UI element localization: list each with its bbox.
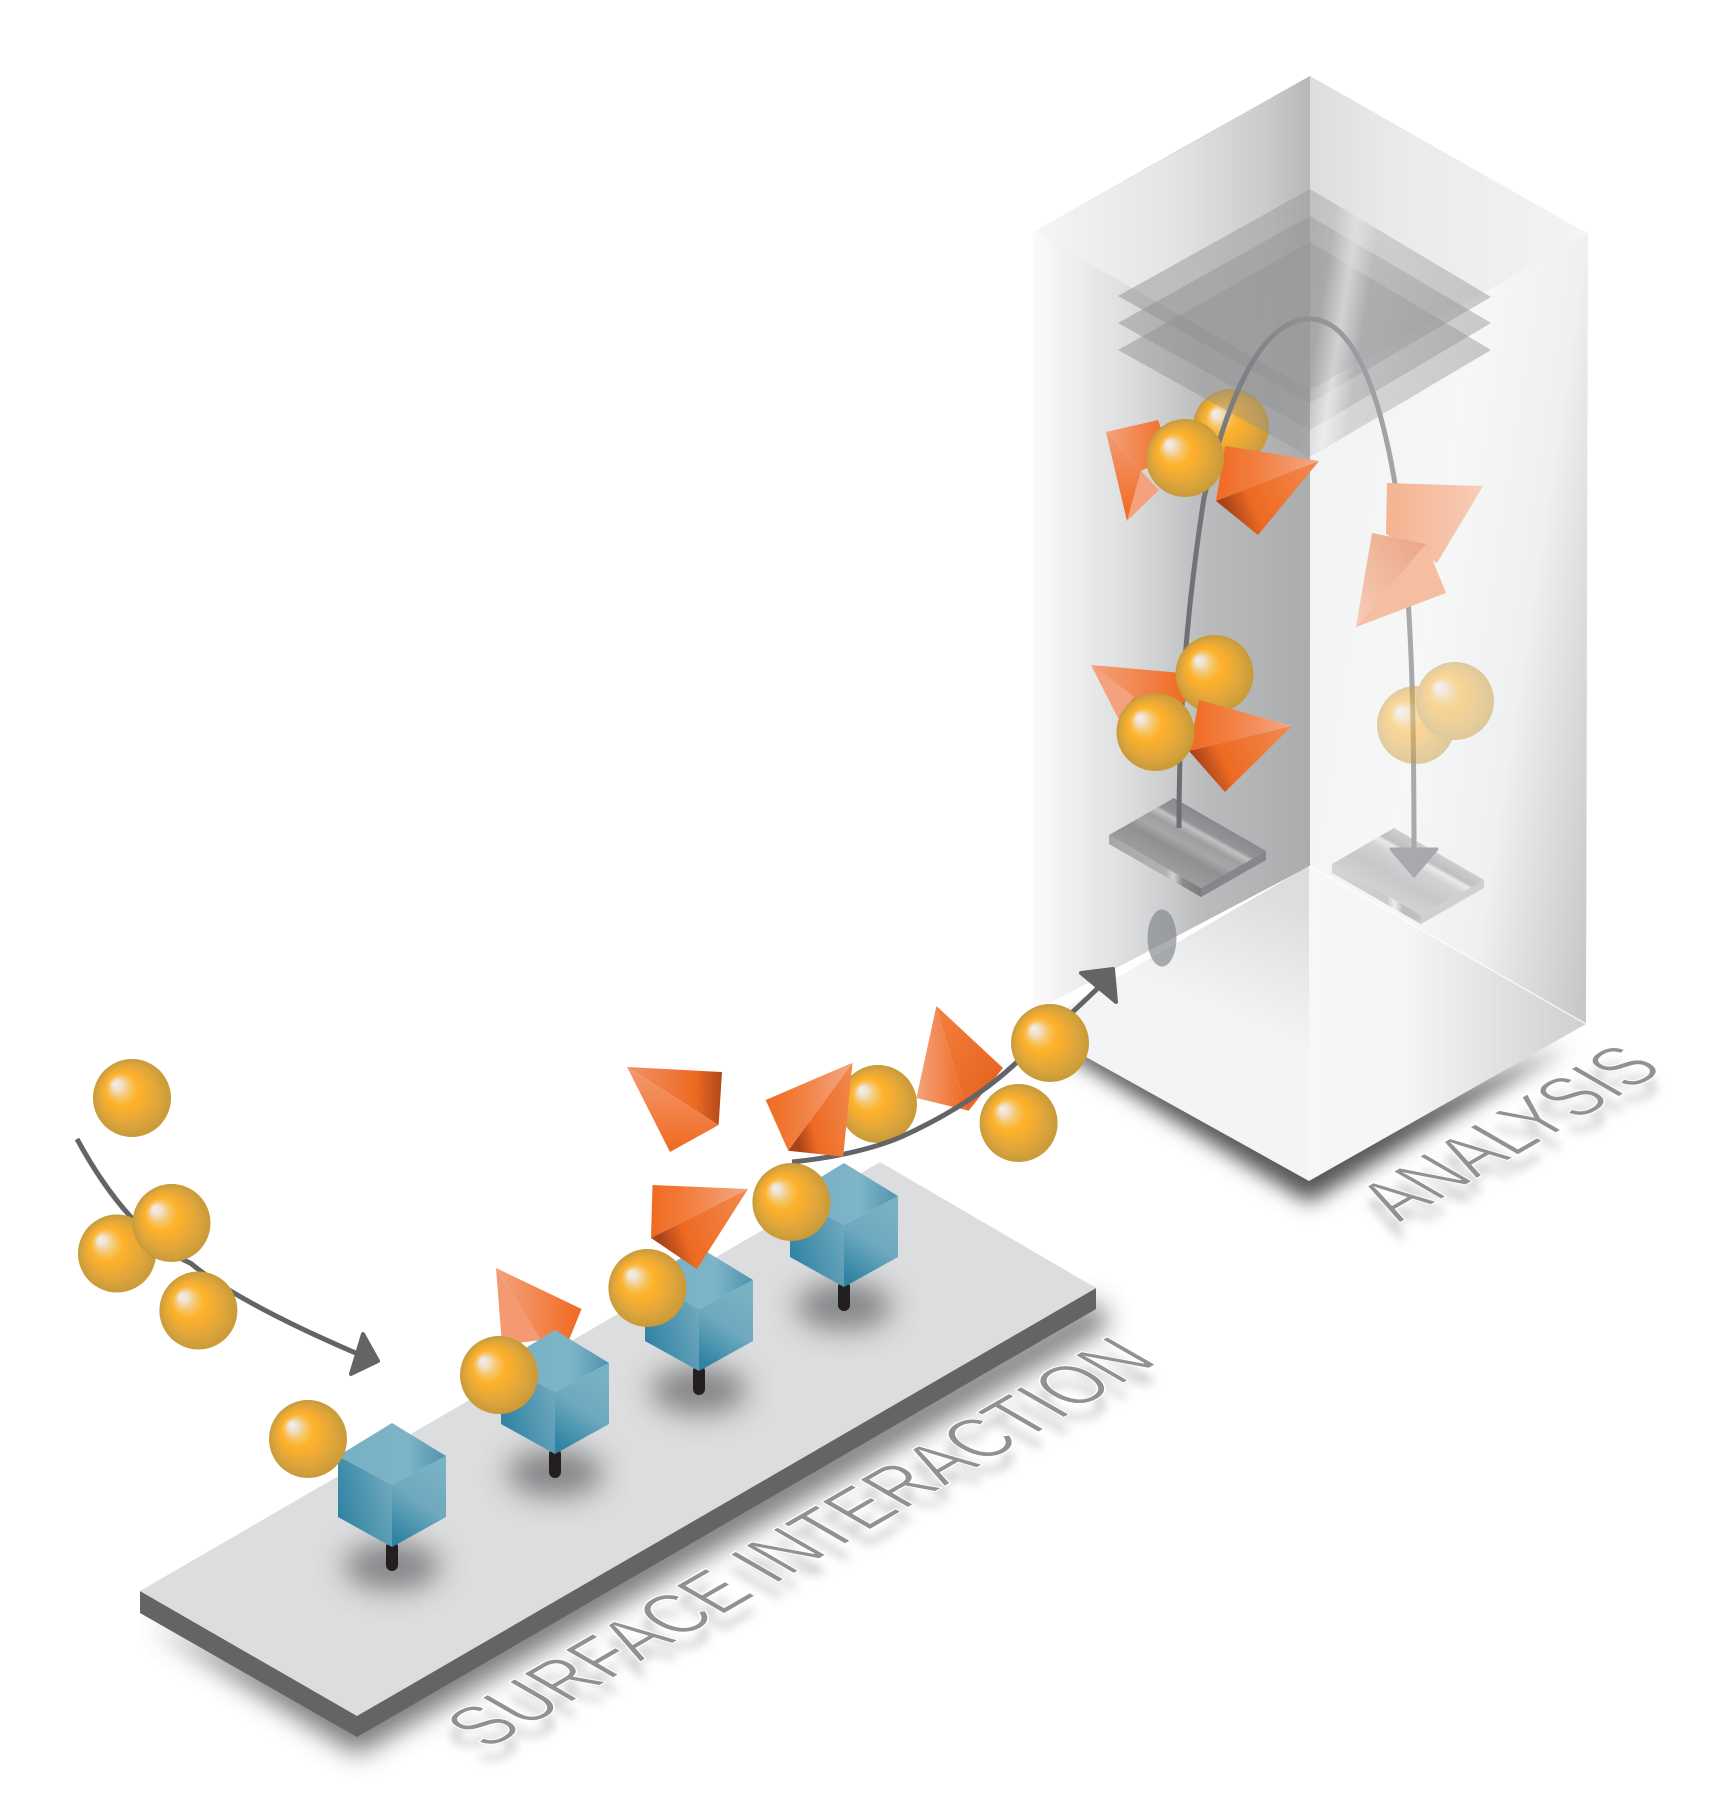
floor shadow <box>1060 1040 1570 1203</box>
ball lower right <box>980 1084 1058 1162</box>
right slab <box>1332 828 1484 924</box>
free tetrahedron <box>627 1067 722 1152</box>
faded tetrahedron upper <box>1386 483 1483 563</box>
label shadows: SURFACE INTERACTION <box>426 1342 1176 1775</box>
arrow: outflow curve <box>792 969 1116 1162</box>
ball at receptor 3 <box>608 1249 686 1327</box>
panel: analysis chamber <box>1032 76 1588 1181</box>
upper ions: tetrahedron right <box>1216 446 1319 535</box>
receptor 3 <box>645 1247 753 1395</box>
receptor 4 <box>790 1163 898 1311</box>
left slab <box>1109 798 1266 897</box>
ball entering chamber <box>1011 1004 1089 1082</box>
chamber floor <box>1032 866 1586 1181</box>
platform shadow <box>150 1300 1110 1755</box>
lower ions: ball back <box>1176 635 1254 713</box>
receptor 1 <box>338 1423 446 1571</box>
ball at receptor 2 <box>460 1336 538 1414</box>
balls in flow <box>78 1059 237 1350</box>
detector plates <box>1118 189 1491 457</box>
arrow: inflow curve <box>77 1139 378 1374</box>
chamber top plane <box>1035 76 1588 390</box>
aperture <box>1148 910 1176 966</box>
faded tetrahedron lower <box>1356 533 1446 627</box>
lower ions: tetrahedron left <box>1091 665 1186 718</box>
receptor 2 <box>501 1330 609 1478</box>
platform left side <box>140 1591 357 1737</box>
upper ions: tetrahedron left <box>1106 420 1171 521</box>
tetrahedron behind receptor 2 <box>496 1268 582 1350</box>
label shadows <box>426 1049 1681 1775</box>
upper ions: ball <box>1146 419 1224 497</box>
ball behind plates <box>1193 389 1269 465</box>
receptor shadows <box>344 1282 892 1590</box>
tetrahedron on outflow <box>766 1063 852 1157</box>
lower ions: tetrahedron right <box>1189 700 1292 792</box>
platform right side <box>357 1288 1096 1737</box>
faded balls <box>1377 662 1494 764</box>
panel: surface platform <box>140 1162 1096 1737</box>
platform top <box>140 1162 1096 1716</box>
tetrahedron upper right <box>916 1006 1003 1111</box>
ball at receptor 4 <box>752 1163 830 1241</box>
label: surface interaction: SURFACE INTERACTION <box>426 1326 1176 1759</box>
left wall <box>1033 76 1310 1012</box>
ball behind tetrahedron <box>839 1065 917 1143</box>
right wall <box>1310 76 1588 1024</box>
lower ions: ball front <box>1116 693 1194 771</box>
tetrahedron above receptor 3 <box>651 1185 748 1269</box>
ball at receptor 1 <box>269 1400 347 1478</box>
arrow: flight path arc <box>1179 319 1437 876</box>
